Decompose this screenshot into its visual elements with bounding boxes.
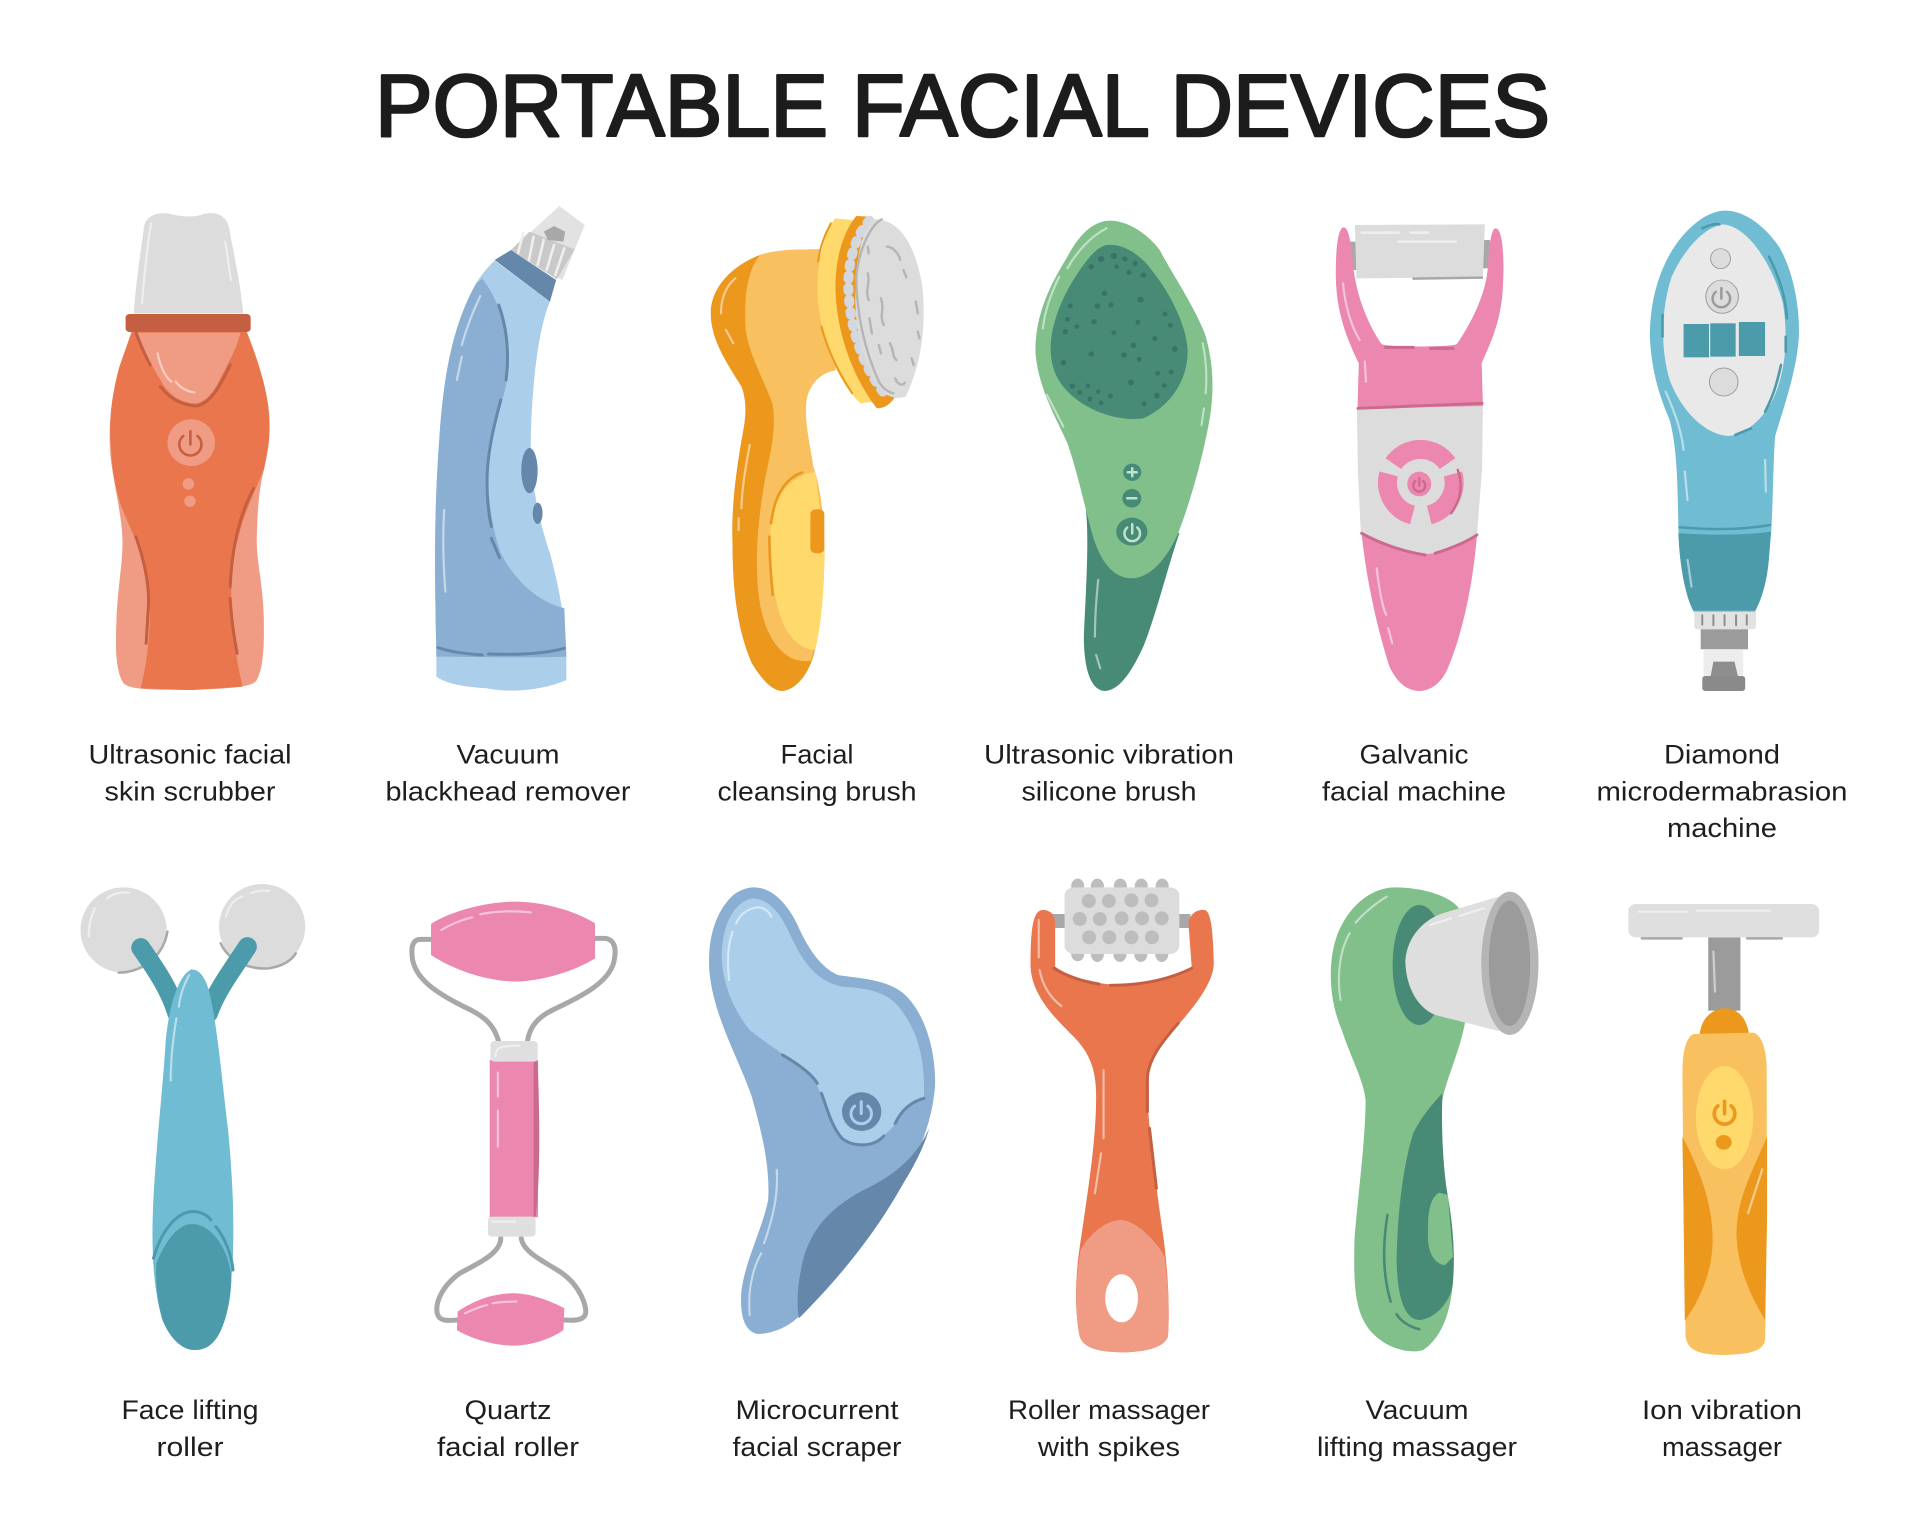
label: roller massager with spikes: Roller massager [1008,1395,1210,1425]
grip panel [770,472,824,650]
bristle teeth [848,221,887,397]
label: facial cleansing brush: Facial [780,740,854,770]
handle [1650,211,1799,612]
large stone [431,902,595,982]
label: facial cleansing brush: cleansing brush [718,776,916,806]
suction cup [1405,897,1511,1034]
top face [722,898,924,1144]
device: ion vibration massager [1628,904,1819,1355]
grip [1076,1220,1169,1352]
label: vacuum lifting massager: Vacuum [1366,1395,1468,1425]
device: roller massager with spikes [1031,879,1214,1352]
device: quartz facial roller [412,902,615,1346]
control oval [1696,1066,1753,1169]
label: ion vibration massager: massager [1662,1432,1782,1462]
shaded underside [798,1128,929,1318]
body [435,261,566,691]
stem [1708,937,1740,1011]
device: microcurrent facial scraper [709,887,935,1334]
handle [1682,1033,1767,1355]
label: ultrasonic facial skin scrubber [88,740,292,806]
label: diamond microdermabrasion machine: microdermabrasion [1596,776,1848,806]
label: face lifting roller [122,1395,258,1462]
bristle pad [855,219,924,398]
device: ultrasonic vibration silicone brush [1035,221,1212,691]
side buttons [521,448,538,493]
label: galvanic facial machine [1322,740,1506,806]
label: vacuum blackhead remover [386,740,631,806]
body [1035,221,1212,578]
top button [1711,249,1730,269]
grey band [1357,406,1483,554]
label: diamond microdermabrasion machine: machine [1667,813,1777,843]
label: roller massager with spikes: with spikes [1037,1432,1180,1462]
label: microcurrent facial scraper: facial scraper [732,1432,902,1462]
device: face lifting roller [80,884,305,1350]
side button [810,509,824,553]
label: microcurrent facial scraper: Microcurrent [736,1395,899,1425]
axle [1051,914,1190,928]
power button [1706,280,1738,313]
outer body [709,887,935,1334]
handle [152,969,233,1350]
device: ultrasonic facial skin scrubber [110,213,270,690]
tail [1084,510,1179,691]
label: ultrasonic vibration silicone brush [984,740,1234,806]
label: diamond microdermabrasion machine: Diamond [1664,740,1780,770]
window [138,333,240,403]
spikes [1071,879,1169,962]
buttons [1123,464,1141,481]
device: vacuum blackhead remover [435,206,585,691]
device: diamond microdermabrasion machine [1650,211,1799,691]
handle end [156,1224,231,1350]
hanging hole [1105,1274,1138,1322]
label: ultrasonic vibration silicone brush: Ultrasonic vibration [984,740,1234,770]
power button [842,1092,881,1131]
dark ring [1393,905,1446,1025]
axle [1348,242,1356,270]
label: galvanic facial machine: Galvanic [1360,740,1468,770]
handle [711,249,836,691]
brush head [817,218,893,403]
label: face lifting roller: roller [156,1432,224,1462]
tip [1694,610,1756,629]
lower button [1709,368,1738,396]
label: vacuum lifting massager [1317,1395,1517,1462]
device: vacuum lifting massager [1331,887,1538,1351]
control ring [1388,449,1461,515]
control panel [1663,224,1786,436]
label: quartz facial roller [437,1395,579,1462]
label: quartz facial roller: facial roller [437,1432,579,1462]
wire frame [412,938,615,1320]
head bar [1628,904,1819,937]
label: ion vibration massager [1642,1395,1802,1462]
label: ultrasonic facial skin scrubber: Ultrasonic facial [88,740,292,770]
label: vacuum blackhead remover: blackhead remover [386,776,631,806]
label: face lifting roller: Face lifting [122,1395,258,1425]
collar band [126,314,251,332]
label: quartz facial roller: Quartz [464,1395,552,1425]
label: ultrasonic vibration silicone brush: silicone brush [1022,776,1196,806]
roller [1355,224,1485,278]
collar [495,250,556,302]
body [1331,887,1465,1351]
small stone [457,1293,564,1346]
label: diamond microdermabrasion machine [1596,740,1848,843]
label: ultrasonic facial skin scrubber: skin scrubber [104,776,276,806]
silicone pad [1051,245,1188,419]
power button [167,419,215,466]
label: vacuum blackhead remover: Vacuum [456,740,560,770]
label: galvanic facial machine: facial machine [1322,776,1506,806]
handle [490,1060,538,1217]
label: ion vibration massager: Ion vibration [1642,1395,1802,1425]
handle [1031,910,1214,1352]
body [1336,227,1503,691]
label: vacuum lifting massager: lifting massager [1317,1432,1517,1462]
neck cap [1699,1008,1749,1035]
title: PORTABLE FACIAL DEVICES [375,56,1550,155]
side button [1428,1193,1453,1265]
roller balls [80,887,167,973]
label: facial cleansing brush [718,740,916,806]
arms [141,947,247,1013]
device: galvanic facial machine [1336,224,1503,691]
display [1684,324,1709,357]
nozzle [511,206,585,280]
label: roller massager with spikes [1008,1395,1210,1462]
label: microcurrent facial scraper [732,1395,902,1462]
scrubber blade [134,213,243,313]
pad dots [1060,253,1178,406]
body [110,332,270,690]
indicator dots [183,478,194,490]
roller drum [1065,887,1179,954]
device: facial cleansing brush [711,216,924,691]
